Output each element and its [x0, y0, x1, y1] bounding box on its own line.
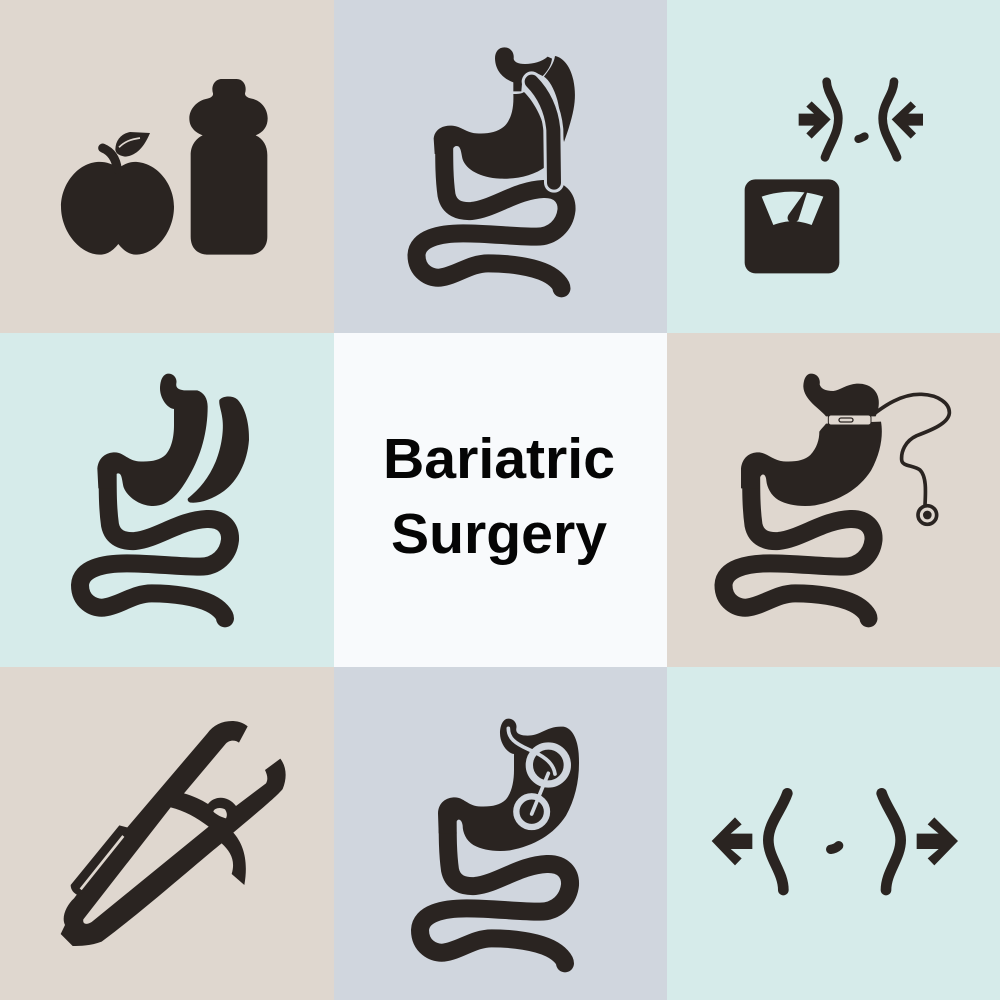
icon: intestine	[420, 817, 570, 963]
icon: waist with outward arrows	[712, 793, 958, 890]
icon: banded stomach	[741, 374, 949, 524]
panel: adjustable gastric band	[667, 333, 1000, 667]
panel: skinfold caliper	[0, 667, 334, 1000]
icon: water bottle	[189, 79, 268, 255]
icon: stomach with balloons	[438, 719, 579, 851]
panel: sleeve gastrectomy	[0, 333, 334, 667]
icon: bypass stomach	[434, 47, 575, 183]
panel: waist expansion	[667, 667, 1000, 1000]
panel: intragastric balloon	[334, 667, 667, 1000]
icon: shrinking waist	[799, 82, 923, 157]
icon: apple	[61, 132, 174, 255]
panel: apple and water bottle	[0, 0, 334, 333]
icon: caliper	[61, 721, 286, 946]
icon: sleeve stomach and removed part	[97, 374, 249, 506]
title second line: Surgery	[391, 502, 607, 566]
icon: bathroom scale	[745, 179, 839, 273]
title: Bariatric	[383, 427, 615, 491]
panel: gastric bypass	[334, 0, 667, 333]
panel: weight loss scale	[667, 0, 1000, 333]
icon: intestine	[416, 142, 567, 288]
icon: intestine	[723, 472, 874, 618]
panel: title	[334, 333, 667, 667]
icon: intestine	[80, 472, 230, 618]
